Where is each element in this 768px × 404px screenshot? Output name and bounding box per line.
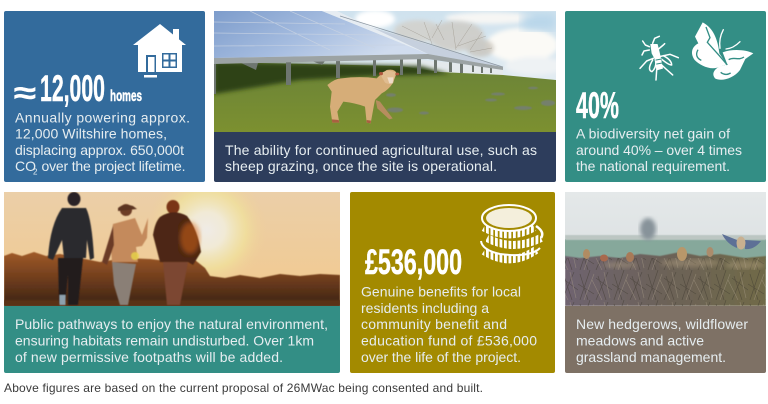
- text block: pathways caption: ensuring habitats remain undisturbed. Over 1km: [15, 332, 314, 348]
- caption bar: [565, 306, 766, 373]
- photo: walkers at sunset: [4, 192, 340, 306]
- text block: homes description: 2: [33, 168, 38, 176]
- array legs: [214, 57, 492, 94]
- text block: fund description: residents including a: [361, 300, 489, 316]
- text block: grazing caption: The ability for continued agricultural use, such as: [225, 142, 537, 158]
- text block: biodiversity description: [576, 126, 742, 174]
- text block: hedgerows caption: grassland management.: [576, 349, 726, 365]
- grass: [214, 62, 556, 132]
- birds: [583, 234, 761, 262]
- text block: homes description: over the project lifetime.: [42, 158, 186, 174]
- text block: fund description: [361, 284, 537, 365]
- figure: £536,000: £536,000: [365, 243, 462, 282]
- text block: homes description: Annually powering approx.: [15, 110, 190, 126]
- panel: hedgerows: [565, 192, 766, 373]
- text block: hedgerows caption: [576, 316, 748, 365]
- figure: 12,000: 12,000: [40, 68, 105, 109]
- person right: [153, 200, 201, 305]
- panel: public pathways: [4, 192, 340, 373]
- person middle: [102, 204, 148, 305]
- text block: homes description: 12,000 Wiltshire homes,: [15, 126, 167, 142]
- see-through area under array: [400, 58, 503, 76]
- solar panels: [214, 11, 428, 58]
- hedge: [565, 252, 766, 306]
- sheep: [327, 70, 399, 123]
- text block: pathways caption: [15, 316, 328, 365]
- text block: homes description: displacing approx. 650,000t: [15, 142, 184, 158]
- photo: solar array with sheep: [214, 10, 565, 132]
- text block: fund description: education fund of £536,000: [361, 332, 537, 348]
- icon: insect: [640, 36, 678, 80]
- person left: [48, 192, 94, 305]
- text block: fund description: over the life of the project.: [361, 349, 521, 365]
- text block: hedgerows caption: New hedgerows, wildflower: [576, 316, 748, 332]
- caption bar: [4, 306, 340, 373]
- label: homes: homes: [110, 88, 142, 105]
- footnote: Above figures are based on the current proposal of 26MWac being consented and built.: [4, 381, 483, 395]
- photo: birds on hedgerow: [565, 192, 766, 306]
- icon: house: [133, 24, 186, 78]
- text block: pathways caption: of new permissive footpaths will be added.: [15, 349, 283, 365]
- tree line: [4, 252, 340, 306]
- text block: grazing caption: sheep grazing, once the site is operational.: [225, 158, 497, 174]
- tree: [394, 20, 494, 57]
- panel: sheep grazing: [214, 10, 565, 182]
- text block: biodiversity description: around 40% – over 4 times: [576, 142, 742, 158]
- text block: grazing caption: [225, 142, 537, 174]
- text block: hedgerows caption: meadows and active: [576, 332, 704, 348]
- text block: fund description: community benefit and: [361, 316, 507, 332]
- text block: homes description: [15, 110, 190, 176]
- icon: butterfly: [692, 22, 753, 80]
- text block: pathways caption: Public pathways to enjoy the natural environment,: [15, 316, 328, 332]
- text block: fund description: Genuine benefits for local: [361, 284, 521, 300]
- icon: coin stack: [481, 205, 542, 259]
- panel: community fund: [350, 192, 555, 373]
- panel: homes powered: [4, 11, 205, 182]
- text block: homes description: CO: [15, 158, 36, 174]
- panel: biodiversity: [565, 11, 766, 182]
- caption bar: [214, 132, 556, 182]
- text block: biodiversity description: the national requirement.: [576, 158, 730, 174]
- figure: 40%: 40%: [576, 85, 619, 126]
- grass tufts: [386, 87, 555, 114]
- text block: biodiversity description: A biodiversity net gain of: [576, 126, 730, 142]
- approximately symbol: ≈: [14, 77, 36, 110]
